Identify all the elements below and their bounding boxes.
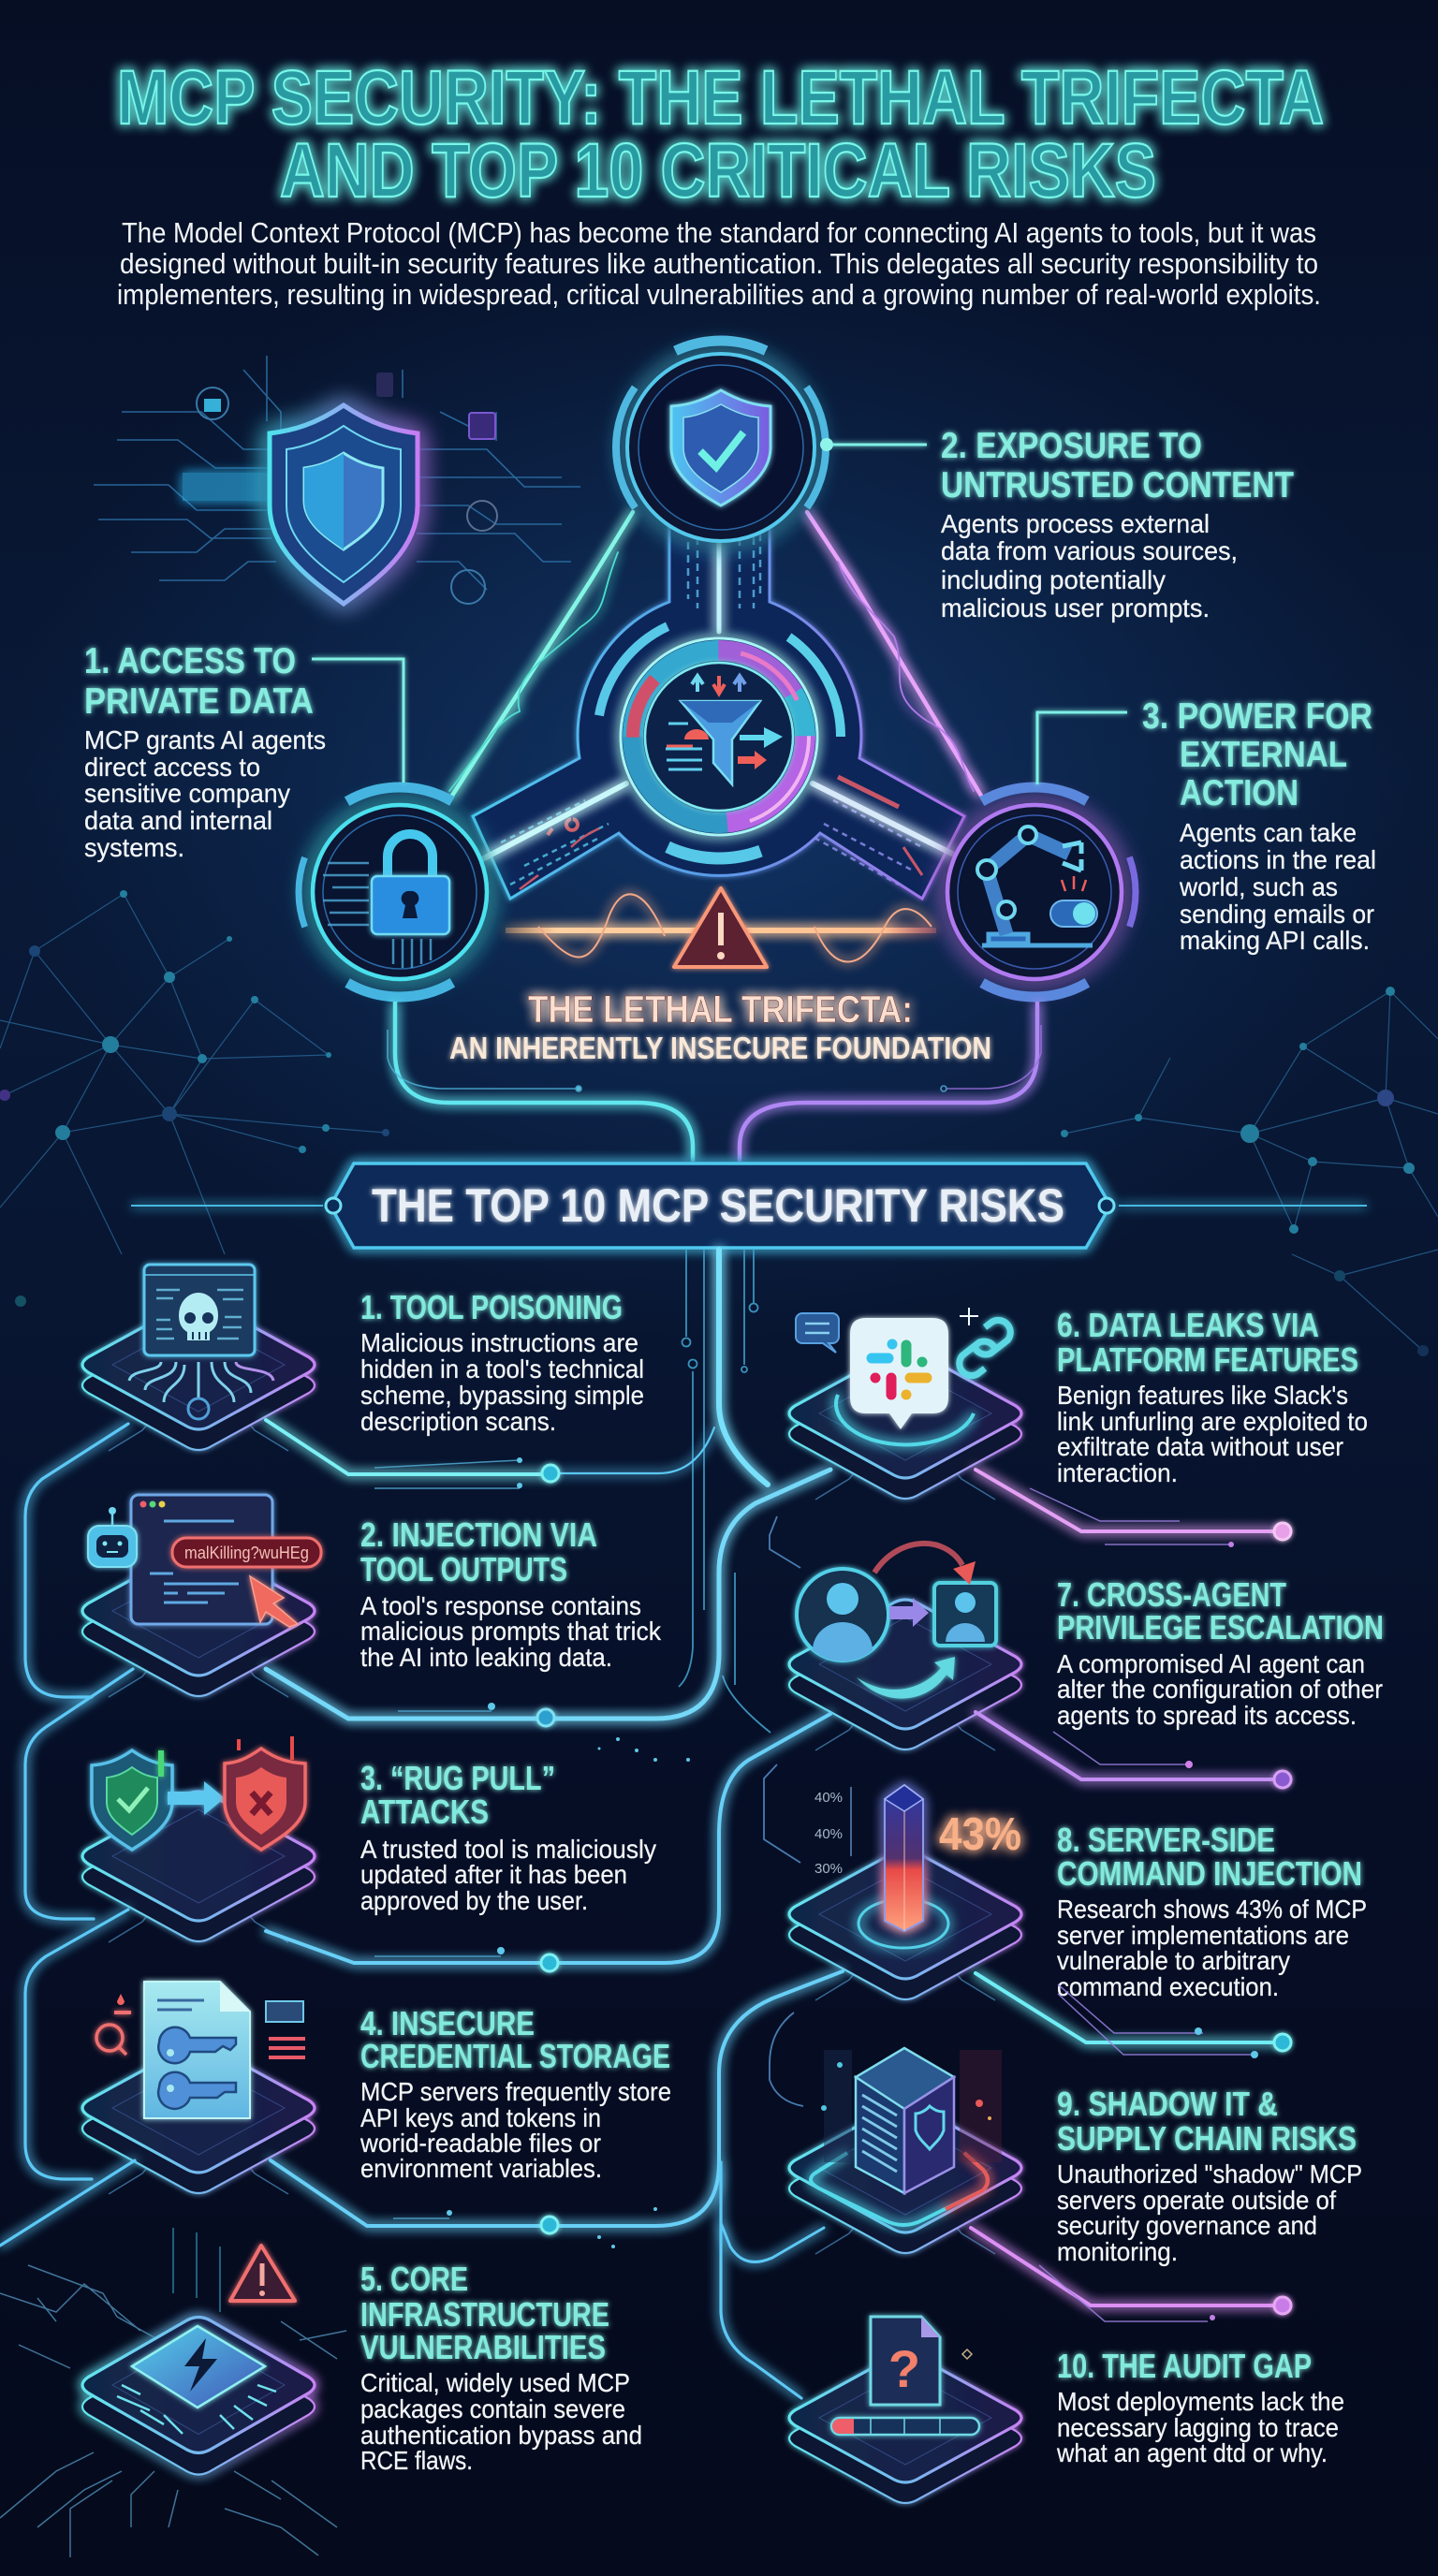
label: 1. access to private data bbox=[84, 641, 404, 862]
label: 3. power for external action: making API calls. bbox=[1180, 926, 1370, 955]
panel: risk 1 tool poisoning bbox=[82, 1265, 644, 1451]
label: 1. access to private data: systems. bbox=[84, 833, 184, 862]
risk 1 description bbox=[360, 1328, 644, 1436]
risk 9 description: monitoring. bbox=[1057, 2237, 1178, 2266]
label: 1. access to private data: sensitive company bbox=[84, 779, 290, 808]
risk 3 description: approved by the user. bbox=[360, 1886, 588, 1915]
heading: the lethal trifecta: AN INHERENTLY INSECURE FOUNDATION bbox=[449, 1031, 991, 1065]
risk 5 heading: INFRASTRUCTURE bbox=[360, 2295, 609, 2334]
label: 2. exposure to untrusted content: malicious user prompts. bbox=[941, 593, 1210, 622]
icon: padlock bbox=[323, 834, 449, 968]
risk 5 description: RCE flaws. bbox=[360, 2446, 473, 2475]
energy wave between lock and robot nodes bbox=[506, 894, 936, 962]
risk 6 heading: PLATFORM FEATURES bbox=[1057, 1340, 1358, 1379]
icon: 43 percent bar chart: 40% bbox=[814, 1790, 843, 1806]
risk 10 description: Most deployments lack the bbox=[1057, 2387, 1344, 2416]
risk 3 description bbox=[360, 1835, 656, 1915]
heading: the lethal trifecta: THE LETHAL TRIFECTA: bbox=[528, 988, 913, 1031]
connector network: left column outputs and trunk bbox=[0, 1250, 843, 2398]
risk 4 heading bbox=[360, 2004, 670, 2075]
risk 2 heading bbox=[360, 1515, 597, 1588]
label: 3. power for external action: ACTION bbox=[1180, 773, 1299, 813]
colourful data ring bbox=[601, 619, 837, 855]
title: AND TOP 10 CRITICAL RISKS bbox=[280, 128, 1156, 213]
panel: risk 4 insecure credential storage bbox=[82, 1982, 671, 2194]
icon: funnel with data arrows bbox=[666, 676, 783, 784]
risk 7 description: agents to spread its access. bbox=[1057, 1701, 1357, 1730]
risk 6 description: link unfurling are exploited to bbox=[1057, 1407, 1368, 1436]
label: 3. power for external action: EXTERNAL bbox=[1180, 735, 1347, 775]
risk 5 heading bbox=[360, 2260, 609, 2366]
risk 8 description: command execution. bbox=[1057, 1972, 1279, 2001]
title bbox=[117, 55, 1324, 213]
risk 8 heading: 8. SERVER-SIDE bbox=[1057, 1821, 1275, 1859]
background network: left and right constellations bbox=[0, 890, 1438, 1356]
node: center funnel circle bbox=[550, 567, 888, 906]
panel: risk 6 data leaks via platform features bbox=[789, 1306, 1368, 1500]
node: top shield circle bbox=[575, 301, 927, 593]
risk 9 heading: 9. SHADOW IT & bbox=[1057, 2085, 1278, 2123]
label: 1. access to private data: direct access to bbox=[84, 753, 260, 782]
risk 5 description: authentication bypass and bbox=[360, 2421, 642, 2450]
secondary thin traces below trifecta bbox=[388, 1025, 1041, 1091]
risk 9 heading: SUPPLY CHAIN RISKS bbox=[1057, 2119, 1357, 2158]
risk 4 description bbox=[360, 2077, 671, 2183]
panel: risk 10 the audit gap bbox=[789, 2317, 1344, 2503]
risk 5 heading: 5. CORE bbox=[360, 2260, 468, 2298]
label: 2. exposure to untrusted content: 2. EXPOSURE TO bbox=[941, 426, 1202, 466]
banner: the top 10 mcp security risks bbox=[131, 1164, 1367, 1248]
intro paragraph: The Model Context Protocol (MCP) has become the standard for connecting AI agents to tools, but it was bbox=[122, 216, 1316, 249]
risk 3 heading bbox=[360, 1759, 555, 1831]
risk 3 heading: ATTACKS bbox=[360, 1793, 489, 1831]
icon: document with keys bbox=[96, 1982, 305, 2118]
label: 2. exposure to untrusted content: Agents process external bbox=[941, 509, 1210, 538]
panel: risk 2 injection via tool outputs bbox=[82, 1495, 662, 1697]
risk 9 description: Unauthorized "shadow" MCP bbox=[1057, 2159, 1362, 2188]
risk 7 description: A compromised AI agent can bbox=[1057, 1649, 1365, 1678]
label: 3. power for external action: 3. POWER FOR bbox=[1142, 696, 1372, 737]
risk 2 description: A tool's response contains bbox=[360, 1591, 641, 1620]
icon: code window, robot and malicious prompt: malKilling?wuHEg bbox=[184, 1544, 309, 1562]
risk 6 heading bbox=[1057, 1306, 1358, 1379]
risk 8 description: vulnerable to arbitrary bbox=[1057, 1946, 1290, 1975]
risk 8 heading bbox=[1057, 1821, 1362, 1893]
icon: chip with lightning bolt bbox=[117, 2326, 276, 2434]
risk 5 description bbox=[360, 2368, 642, 2475]
icon: agents with escalation arrows bbox=[797, 1544, 996, 1699]
label: 2. exposure to untrusted content bbox=[941, 426, 1294, 622]
label: 1. access to private data: 1. ACCESS TO bbox=[84, 641, 296, 681]
risk 4 description: API keys and tokens in bbox=[360, 2103, 601, 2132]
label: 1. access to private data: PRIVATE DATA bbox=[84, 681, 314, 722]
intro paragraph: designed without built-in security features like authentication. This delegates all security responsibility to bbox=[120, 247, 1318, 280]
intro paragraph: implementers, resulting in widespread, critical vulnerabilities and a growing number of real-world exploits. bbox=[117, 278, 1321, 311]
intro paragraph bbox=[117, 216, 1321, 311]
risk 2 description: malicious prompts that trick bbox=[360, 1617, 662, 1646]
label: 3. power for external action: actions in the real bbox=[1180, 845, 1376, 874]
risk 4 description: worid-readable files or bbox=[360, 2129, 601, 2158]
banner: the top 10 mcp security risks: THE TOP 10 MCP SECURITY RISKS bbox=[372, 1179, 1064, 1232]
label: 2. exposure to untrusted content: data from various sources, bbox=[941, 536, 1238, 565]
icon: document with question mark and log bar bbox=[831, 2317, 979, 2435]
risk 6 description: interaction. bbox=[1057, 1458, 1178, 1487]
risk 7 heading bbox=[1057, 1575, 1384, 1647]
icon: warning triangle bbox=[230, 2246, 295, 2301]
node: robotic arm circle bbox=[891, 749, 1178, 1035]
diagram: central triangle Y-shaped frame with data arms bbox=[473, 505, 964, 899]
risk 5 description: Critical, widely used MCP bbox=[360, 2368, 630, 2397]
risk 6 heading: 6. DATA LEAKS VIA bbox=[1057, 1306, 1319, 1344]
risk 4 heading: 4. INSECURE bbox=[360, 2004, 535, 2042]
risk 9 heading bbox=[1057, 2085, 1357, 2158]
icon: isometric server bbox=[811, 2048, 1002, 2225]
risk 4 heading: CREDENTIAL STORAGE bbox=[360, 2037, 670, 2075]
risk 5 description: packages contain severe bbox=[360, 2394, 625, 2423]
lightning connections between top, left and right nodes bbox=[449, 512, 981, 798]
risk 3 description: updated after it has been bbox=[360, 1860, 627, 1889]
label: 3. power for external action: world, such as bbox=[1179, 872, 1338, 901]
label: 3. power for external action: sending emails or bbox=[1180, 900, 1374, 929]
risk 7 heading: 7. CROSS-AGENT bbox=[1057, 1575, 1286, 1614]
risk 9 description: servers operate outside of bbox=[1057, 2186, 1336, 2215]
risk 10 description: what an agent dtd or why. bbox=[1056, 2438, 1328, 2467]
risk 8 description bbox=[1057, 1895, 1367, 2001]
risk 4 description: environment variables. bbox=[360, 2154, 602, 2183]
risk 1 heading: 1. TOOL POISONING bbox=[360, 1288, 623, 1326]
panel: risk 7 cross-agent privilege escalation bbox=[789, 1544, 1384, 1750]
icon: chat app tile with link bbox=[796, 1308, 1010, 1444]
risk 1 description: hidden in a tool's technical bbox=[360, 1354, 644, 1383]
panel: risk 8 server-side command injection bbox=[789, 1785, 1367, 2001]
panel: risk 9 shadow it and supply chain risks bbox=[789, 2048, 1362, 2266]
icon: document with question mark and log bar: ? bbox=[888, 2339, 920, 2398]
risk 8 heading: COMMAND INJECTION bbox=[1057, 1854, 1362, 1893]
label: 3. power for external action: Agents can take bbox=[1180, 818, 1357, 847]
risk 2 description: the AI into leaking data. bbox=[360, 1643, 612, 1672]
risk 9 description: security governance and bbox=[1057, 2211, 1317, 2240]
connector end nodes bbox=[374, 1457, 1291, 2321]
panel: risk 5 core infrastructure vulnerabilities bbox=[0, 2228, 642, 2557]
icon: window with skull bbox=[129, 1265, 273, 1419]
label: 3. power for external action bbox=[1037, 696, 1376, 955]
label: 1. access to private data: data and internal bbox=[84, 806, 272, 835]
risk 2 heading: 2. INJECTION VIA bbox=[360, 1515, 597, 1554]
risk 7 description: alter the configuration of other bbox=[1057, 1675, 1383, 1704]
icon: 43 percent bar chart bbox=[814, 1785, 1021, 1948]
icon: large digital shield with circuitry bbox=[94, 356, 580, 604]
risk 1 description: Malicious instructions are bbox=[360, 1328, 638, 1357]
risk 8 description: Research shows 43% of MCP bbox=[1057, 1895, 1367, 1924]
circuit traces around chip bbox=[0, 2228, 346, 2557]
risk 10 description: necessary lagging to trace bbox=[1057, 2413, 1339, 2442]
panel: risk 3 rug pull attacks bbox=[82, 1736, 656, 1942]
risk 2 heading: TOOL OUTPUTS bbox=[360, 1550, 567, 1588]
risk 3 heading: 3. “RUG PULL” bbox=[360, 1759, 555, 1797]
risk 6 description: exfiltrate data without user bbox=[1057, 1432, 1343, 1461]
label: 1. access to private data: MCP grants AI agents bbox=[84, 725, 326, 754]
risk 8 description: server implementations are bbox=[1057, 1921, 1349, 1950]
risk 9 description bbox=[1057, 2159, 1362, 2266]
icon: 43 percent bar chart: 30% bbox=[814, 1861, 843, 1877]
icon: trusted shield turning malicious bbox=[92, 1736, 305, 1850]
risk 7 description bbox=[1057, 1649, 1383, 1730]
connectors from trifecta to risks banner bbox=[395, 1002, 1037, 1162]
connector network: trunk thin lines bbox=[679, 1250, 803, 2106]
risk 6 description: Benign features like Slack's bbox=[1057, 1381, 1348, 1410]
heading: the lethal trifecta bbox=[449, 988, 991, 1065]
arm details bbox=[501, 524, 922, 889]
risk 1 description: scheme, bypassing simple bbox=[360, 1381, 644, 1410]
label: 2. exposure to untrusted content: including potentially bbox=[941, 565, 1166, 594]
connector network: right column outputs bbox=[971, 1470, 1278, 2305]
node: lock circle bbox=[257, 749, 543, 1035]
risk 10 heading: 10. THE AUDIT GAP bbox=[1057, 2347, 1312, 2385]
risk 10 description bbox=[1056, 2387, 1344, 2467]
risk 1 description: description scans. bbox=[360, 1407, 556, 1436]
risk 5 heading: VULNERABILITIES bbox=[360, 2328, 606, 2366]
icon: warning triangle bbox=[674, 888, 767, 967]
icon: code window, robot and malicious prompt bbox=[88, 1495, 321, 1627]
icon: robot arm and toggle bbox=[977, 827, 1097, 945]
risk 6 description bbox=[1057, 1381, 1368, 1487]
risk 2 description bbox=[360, 1591, 662, 1672]
icon: 43 percent bar chart: 43% bbox=[939, 1809, 1021, 1860]
label: 2. exposure to untrusted content: UNTRUSTED CONTENT bbox=[941, 465, 1294, 505]
risk 4 description: MCP servers frequently store bbox=[360, 2077, 671, 2106]
risk 3 description: A trusted tool is maliciously bbox=[360, 1835, 656, 1864]
icon: 43 percent bar chart: 40% bbox=[814, 1826, 843, 1842]
